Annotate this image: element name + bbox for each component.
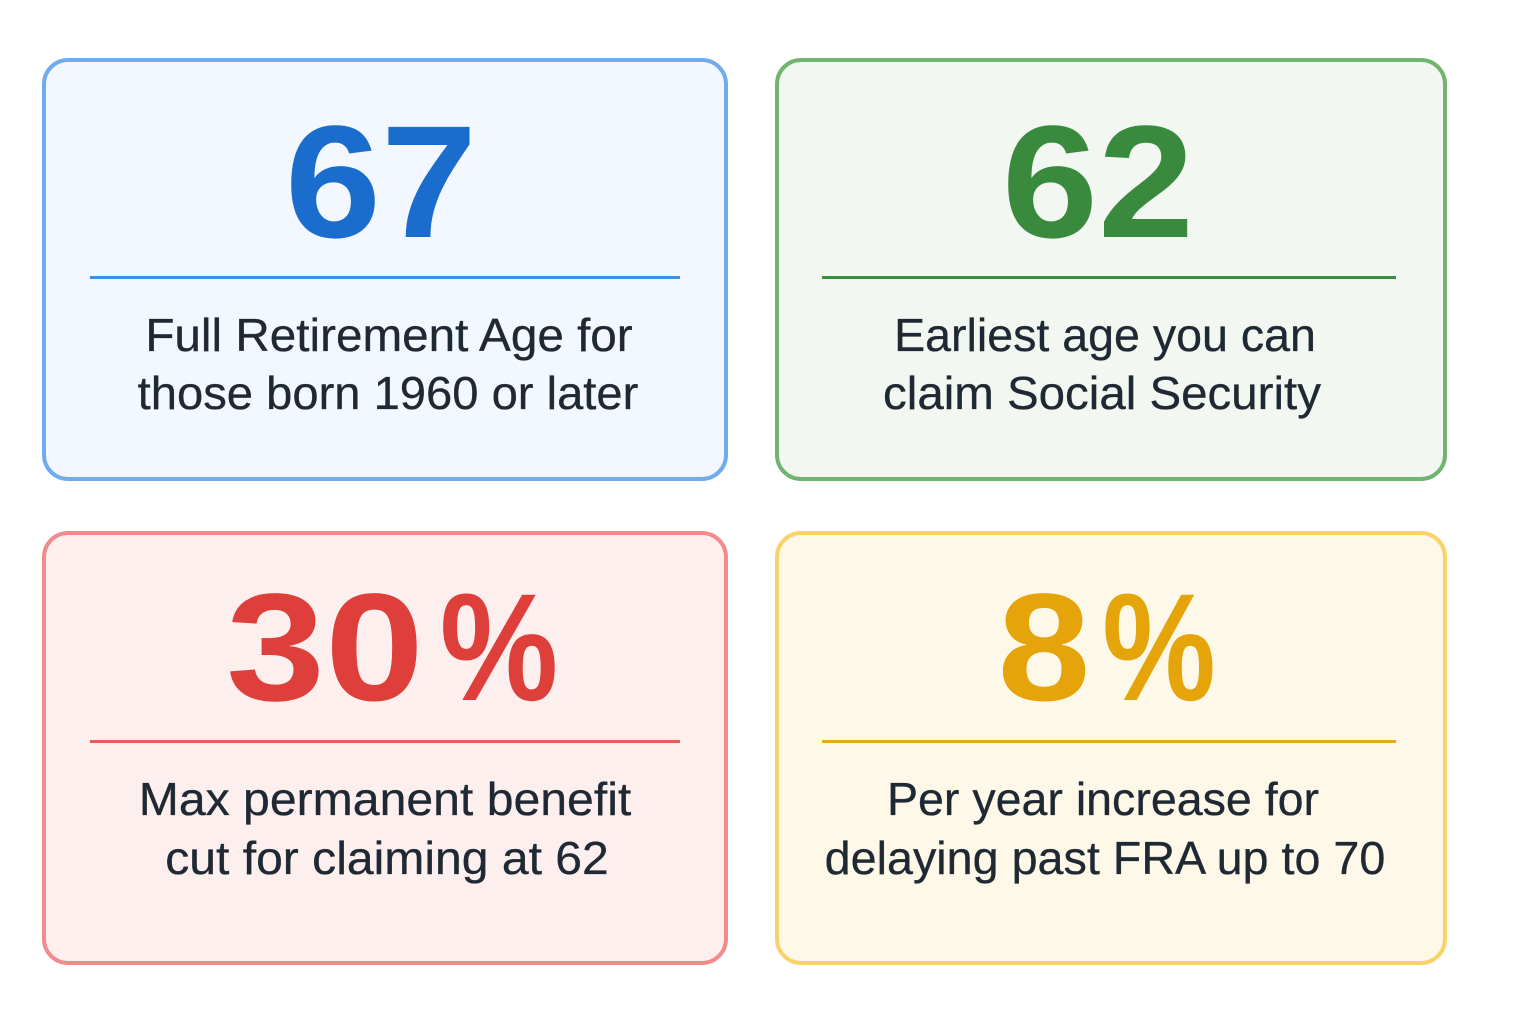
- stat: 8%: [997, 562, 1215, 733]
- panel: earliest claim age: [775, 58, 1447, 481]
- stat: 30%: [226, 562, 558, 733]
- description: full retirement age: [138, 309, 638, 419]
- stat: 30%: %: [439, 562, 558, 733]
- description: earliest claim age: Earliest age you can: [894, 309, 1316, 361]
- description: max benefit cut: cut for claiming at 62: [165, 832, 609, 884]
- stat: 67: 67: [284, 92, 477, 271]
- description: full retirement age: Full Retirement Age for: [145, 309, 632, 361]
- stat: 30%: 30: [226, 562, 424, 733]
- panel: delayed credit: [775, 531, 1447, 965]
- description: delayed credit: delaying past FRA up to 70: [825, 832, 1385, 884]
- panel: full retirement age: [42, 58, 728, 481]
- description: full retirement age: those born 1960 or later: [138, 367, 638, 419]
- description: delayed credit: [825, 773, 1385, 884]
- description: delayed credit: Per year increase for: [887, 773, 1319, 825]
- description: max benefit cut: [139, 773, 632, 884]
- stat: 8%: %: [1102, 562, 1215, 733]
- stat: 62: 62: [1002, 92, 1194, 271]
- description: earliest claim age: claim Social Security: [883, 367, 1320, 419]
- description: max benefit cut: Max permanent benefit: [139, 773, 631, 825]
- panel: max benefit cut: [42, 531, 728, 965]
- divider: [822, 276, 1396, 279]
- stat: 8%: 8: [997, 562, 1090, 733]
- divider: [822, 740, 1396, 743]
- divider: [90, 276, 680, 279]
- description: earliest claim age: [883, 309, 1322, 419]
- divider: [90, 740, 680, 743]
